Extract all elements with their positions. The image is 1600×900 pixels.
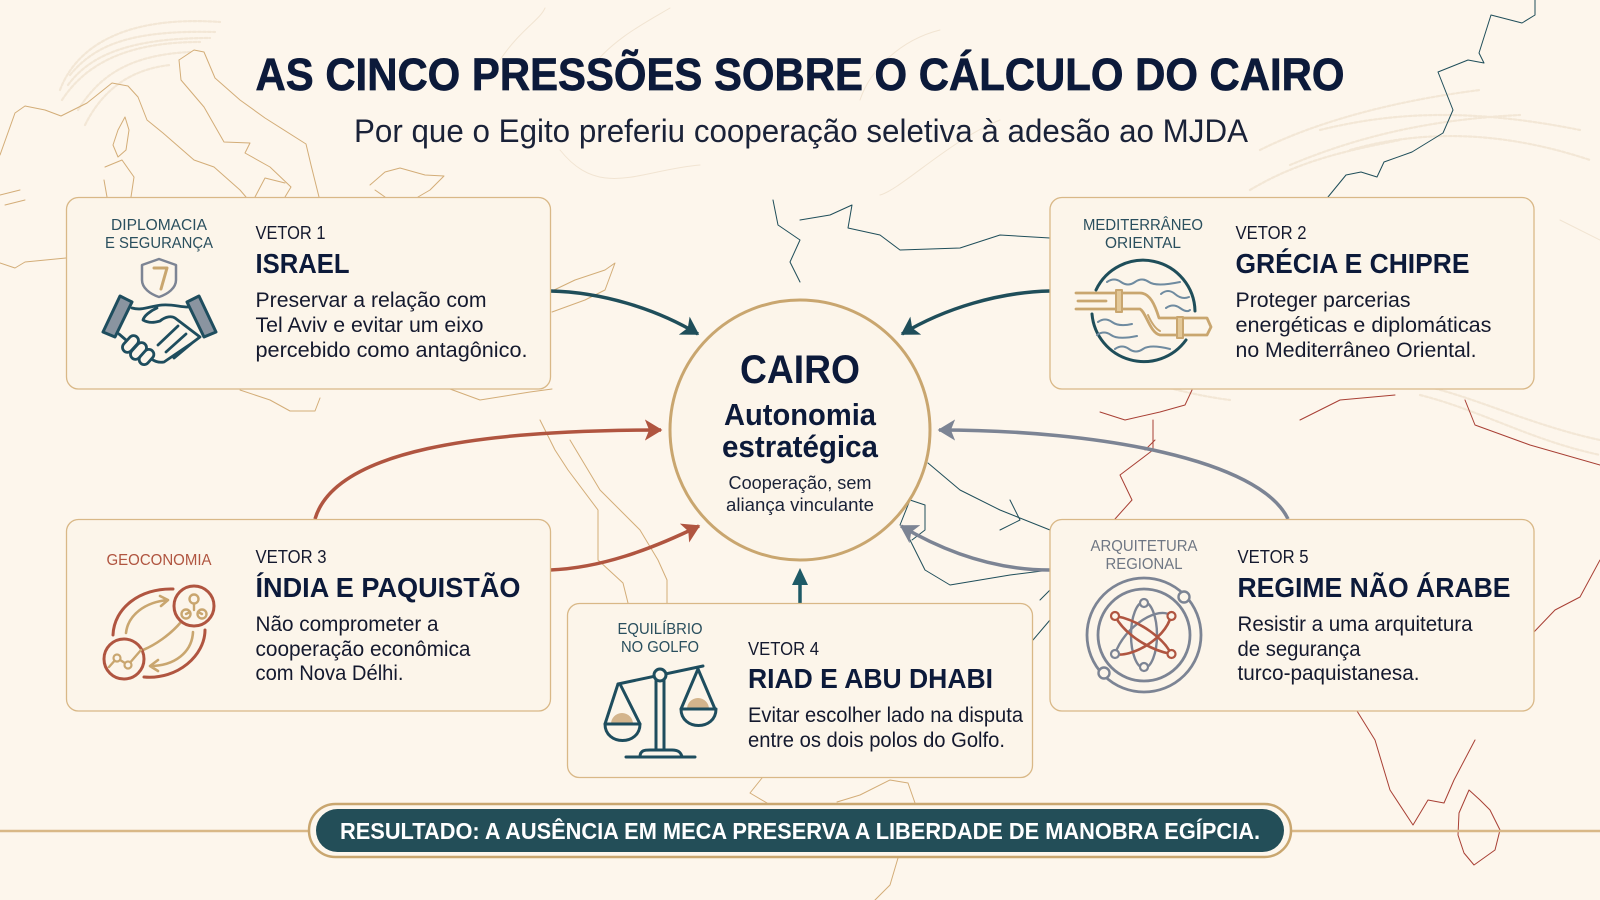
icon: handshake and shield <box>103 259 216 367</box>
panel: vetor 5 Regime não árabe <box>1050 520 1534 711</box>
panel: vetor 1 Israel <box>66 198 550 389</box>
icon: pipeline over sea <box>1076 260 1211 362</box>
icon: balance scale <box>605 666 716 757</box>
vector text: VETOR 1 <box>256 222 326 243</box>
vector text: VETOR 4 <box>748 638 819 659</box>
category label <box>1090 538 1198 573</box>
result banner: RESULTADO: A AUSÊNCIA EM MECA PRESERVA A LIBERDADE DE MANOBRA EGÍPCIA. <box>340 817 1260 844</box>
category label: GEOCONOMIA <box>106 552 212 569</box>
subtitle: Por que o Egito preferiu cooperação seletiva à adesão ao MJDA <box>354 113 1249 149</box>
vector text: VETOR 3 <box>256 546 326 567</box>
arrow: vector 3 upper to Cairo <box>315 430 661 519</box>
vector text: Não comprometer a <box>256 613 439 636</box>
category label <box>1083 215 1203 252</box>
vector text: REGIME NÃO ÁRABE <box>1238 572 1510 603</box>
central circle: Cairo: Autonomia <box>724 397 877 432</box>
central circle: Cairo: Cooperação, sem <box>728 472 872 493</box>
vector text <box>748 638 1023 752</box>
title: AS CINCO PRESSÕES SOBRE O CÁLCULO DO CAIRO <box>256 49 1344 100</box>
category label: EQUILÍBRIO <box>618 619 702 638</box>
vector text: Evitar escolher lado na disputa <box>748 704 1023 727</box>
category label: DIPLOMACIA <box>111 217 207 234</box>
vector text: VETOR 5 <box>1238 546 1308 567</box>
category label: NO GOLFO <box>621 639 699 656</box>
category label: REGIONAL <box>1106 556 1183 573</box>
vector text: Preservar a relação com <box>256 289 486 312</box>
vector text: Proteger parcerias <box>1236 289 1410 312</box>
arrow: vector 2 to Cairo <box>902 291 1050 334</box>
vector text: turco-paquistanesa. <box>1238 662 1420 685</box>
category label <box>618 619 702 656</box>
central circle: Cairo <box>670 300 930 560</box>
vector text: Tel Aviv e evitar um eixo <box>256 314 484 337</box>
vector text: cooperação econômica <box>256 638 471 661</box>
vector text <box>1238 546 1510 685</box>
vector text: ISRAEL <box>256 248 350 279</box>
icon: economic cycle <box>104 586 214 679</box>
arrow: vector 5 upper to Cairo <box>939 430 1288 519</box>
category label: ARQUITETURA <box>1090 538 1198 555</box>
category label: MEDITERRÂNEO <box>1083 215 1203 234</box>
result banner <box>0 804 1600 857</box>
category label: ORIENTAL <box>1105 235 1181 252</box>
vector text: com Nova Délhi. <box>256 662 404 685</box>
category label <box>105 217 213 252</box>
vector text: VETOR 2 <box>1236 222 1306 243</box>
vector text: Resistir a uma arquitetura <box>1238 613 1473 636</box>
panel: vetor 2 Grécia e Chipre <box>1050 198 1534 389</box>
icon: regional network <box>1087 578 1201 692</box>
category label: E SEGURANÇA <box>105 235 213 252</box>
vector text: RIAD E ABU DHABI <box>748 663 993 694</box>
central circle: Cairo: aliança vinculante <box>726 494 874 515</box>
arrow: vector 1 to Cairo <box>550 291 698 334</box>
vector text: GRÉCIA E CHIPRE <box>1236 248 1470 279</box>
vector text: de segurança <box>1238 638 1361 661</box>
vector text: entre os dois polos do Golfo. <box>748 729 1005 752</box>
vector text: no Mediterrâneo Oriental. <box>1236 339 1476 362</box>
arrow: vector 5 lower to Cairo <box>901 526 1050 570</box>
vector text <box>256 546 520 685</box>
vector text: percebido como antagônico. <box>256 339 528 362</box>
vector text: energéticas e diplomáticas <box>1236 314 1492 337</box>
vector text <box>1236 222 1492 362</box>
central circle: Cairo: CAIRO <box>740 348 860 392</box>
panel: vetor 4 Riad e Abu Dhabi <box>568 604 1032 778</box>
vector text <box>256 222 528 362</box>
panel: vetor 3 Índia e Paquistão <box>66 520 550 711</box>
vector text: ÍNDIA E PAQUISTÃO <box>256 572 520 603</box>
central circle: Cairo: estratégica <box>722 429 879 464</box>
arrow: vector 4 to Cairo <box>792 568 808 603</box>
arrow: vector 3 lower to Cairo <box>550 526 699 570</box>
